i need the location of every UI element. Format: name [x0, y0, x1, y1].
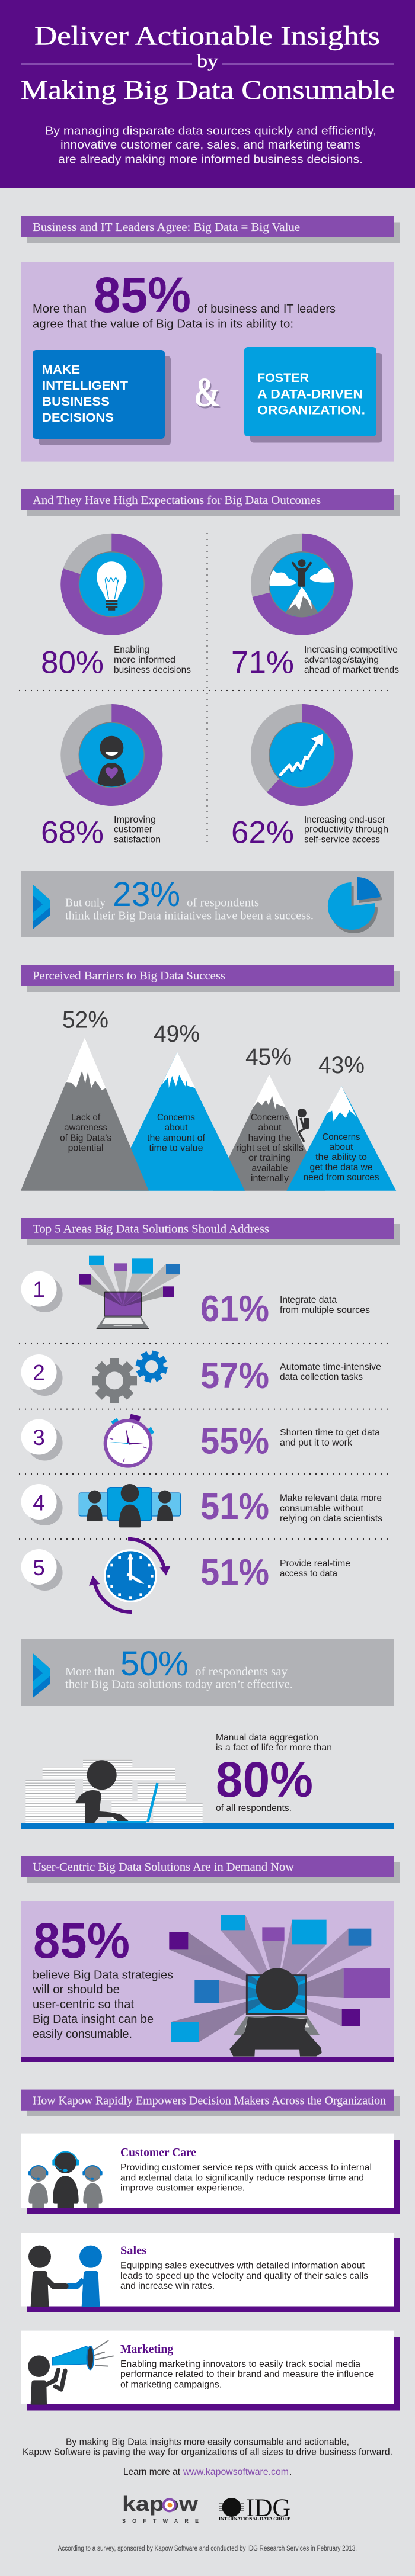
barrier: 49 percent: time to value — [149, 1143, 203, 1153]
callout banner: 50 percent not effective: their Big Data solutions today aren’t effective. — [65, 1678, 293, 1691]
stat: 62 percent — [231, 815, 388, 850]
ampersand: & — [195, 372, 222, 417]
barrier: 43 percent: Concerns — [323, 1132, 360, 1142]
stat: 51 percent real-time: 51% — [200, 1552, 269, 1593]
title: Making Big Data Consumable — [21, 75, 395, 105]
donut chart: 80 percent with light bulb — [60, 534, 162, 635]
section heading: High Expectations: And They Have High Expectations for Big Data Outcomes — [33, 494, 321, 507]
stat: 51 percent: Make relevant data more — [280, 1493, 382, 1504]
stat: 57 percent: 57% — [200, 1356, 269, 1396]
logo: IDG: IDG — [246, 2494, 290, 2522]
card text: improve customer experience. — [120, 2183, 245, 2193]
stat: 57 percent — [200, 1356, 381, 1396]
section heading: How Kapow — [21, 2090, 400, 2116]
barrier: 52 percent: 52% — [62, 1007, 108, 1033]
stat: 61 percent: from multiple sources — [280, 1305, 370, 1315]
stat: 68 percent: customer — [114, 825, 153, 835]
barrier: 49 percent — [147, 1021, 206, 1153]
closing statement: Learn more at — [123, 2467, 181, 2477]
barrier: 45 percent: internally — [251, 1173, 289, 1183]
number badge 4 — [21, 1484, 63, 1525]
stat: 71 percent: advantage/staying — [304, 655, 379, 665]
icon: light bulb — [97, 561, 126, 611]
donut chart: 62 percent with rising arrow — [251, 704, 353, 806]
card: Sales — [21, 2233, 400, 2312]
closing statement: Kapow Software is paving the way for organizations of all sizes to drive business forward. — [23, 2447, 392, 2457]
stat: 55 percent: 55% — [200, 1421, 269, 1462]
icon: laptop with data sources — [79, 1256, 180, 1329]
stat: 80 percent — [41, 645, 191, 680]
panel: 85 percent user-centric — [21, 1901, 394, 2062]
stat: 51 percent — [200, 1486, 382, 1527]
barrier: 49 percent: about — [165, 1123, 188, 1133]
barrier: 43 percent: get the data we — [309, 1162, 373, 1173]
rank 3: shorten time — [21, 1414, 380, 1466]
stat: 51 percent: consumable without — [280, 1504, 364, 1514]
closing statement: www.kapowsoftware.com — [183, 2467, 289, 2477]
barrier: 43 percent: the ability to — [315, 1152, 367, 1162]
number badge 3 — [21, 1419, 63, 1460]
title: Deliver Actionable Insights — [34, 20, 380, 51]
stat: 68 percent — [41, 815, 161, 850]
stat text — [32, 1913, 173, 2041]
card text: Sales — [120, 2244, 146, 2257]
card text: Customer Care — [120, 2146, 196, 2159]
logo: IDG: INTERNATIONAL DATA GROUP — [219, 2516, 290, 2522]
number badge 5: 5 — [33, 1556, 45, 1580]
section heading: Business and IT Leaders Agree — [21, 216, 400, 243]
header banner — [0, 0, 415, 188]
stat: 80 percent manual aggregation — [216, 1733, 332, 1813]
stat: 55 percent: and put it to work — [280, 1438, 353, 1448]
section heading: User-Centric: User-Centric Big Data Solutions Are in Demand Now — [33, 1861, 295, 1874]
barrier: 45 percent: having the — [248, 1133, 292, 1143]
icon: handshake — [28, 2246, 102, 2307]
barrier: 43 percent: need from sources — [304, 1173, 379, 1183]
stat: 57 percent: data collection tasks — [280, 1372, 363, 1382]
card text: and increase win rates. — [120, 2281, 215, 2291]
card text: Marketing — [120, 2343, 173, 2356]
person — [76, 1760, 129, 1823]
number badge 3: 3 — [33, 1425, 45, 1450]
callout: make intelligent business decisions — [33, 350, 171, 445]
logo: IDG — [219, 2494, 290, 2522]
barrier: 43 percent: 43% — [318, 1052, 365, 1078]
stat: 68 percent: 68% — [41, 815, 104, 850]
rank 5: real-time access — [21, 1539, 350, 1612]
stat: 68 percent: satisfaction — [114, 835, 161, 844]
card text: and external data to significantly reduce response time and — [120, 2173, 364, 2183]
intro text: are already making more informed business decisions. — [58, 153, 363, 166]
stat text: easily consumable. — [33, 2028, 132, 2041]
logo: Kapow Software: SOFTWARE — [122, 2518, 199, 2524]
barrier: 45 percent — [236, 1044, 304, 1183]
icon: gears — [92, 1350, 168, 1403]
statement text: of business and IT leaders — [197, 303, 336, 316]
intro text: innovative customer care, sales, and marketing teams — [60, 139, 360, 152]
statement text: 85% — [94, 267, 191, 323]
barrier: 49 percent: the amount of — [147, 1133, 206, 1143]
card text: performance related to their brand and measure the influence — [120, 2369, 374, 2379]
barrier: 43 percent: about — [330, 1142, 353, 1152]
stat text: Big Data insight can be — [33, 2013, 154, 2026]
icon: three users at screens — [79, 1484, 180, 1527]
number badge 2: 2 — [33, 1361, 45, 1385]
logo: Kapow Software: kapow — [122, 2493, 199, 2516]
barrier: 52 percent: Lack of — [71, 1113, 101, 1123]
section heading: Perceived Barriers — [21, 965, 400, 992]
stat: 71 percent: Increasing competitive — [304, 645, 398, 655]
illustration: person buried in paper — [21, 1759, 394, 1829]
stat: 51 percent: relying on data scientists — [280, 1514, 382, 1524]
stat: 80 percent manual aggregation: is a fact of life for more than — [216, 1743, 332, 1753]
stat: 51 percent real-time — [200, 1552, 350, 1593]
barrier: 52 percent — [60, 1007, 111, 1153]
icon: stopwatch — [106, 1414, 154, 1466]
icon: person with megaphone — [28, 2340, 114, 2405]
stat: 68 percent: Improving — [114, 815, 156, 825]
stat: 62 percent: self-service access — [304, 835, 380, 844]
statement text: More than — [33, 303, 87, 316]
card: Marketing — [21, 2331, 400, 2410]
stat: 51 percent: 51% — [200, 1486, 269, 1527]
barrier: 52 percent: awareness — [64, 1123, 107, 1133]
number badge 1 — [21, 1271, 63, 1312]
icon: clock with cycle arrows — [89, 1539, 171, 1612]
barrier: 45 percent: available — [251, 1163, 288, 1174]
callout banner: 23 percent success: of respondents — [187, 897, 259, 910]
stat: 80 percent manual aggregation: 80% — [216, 1752, 313, 1807]
icon: smiling person with heart — [97, 736, 126, 787]
rank 2: automate data collection — [21, 1350, 381, 1403]
callout: make intelligent business decisions: MAKE — [42, 363, 80, 377]
icon: person on summit — [269, 559, 334, 616]
card text: Equipping sales executives with detailed information about — [120, 2261, 365, 2271]
stat: 61 percent: 61% — [200, 1289, 269, 1329]
barrier: 45 percent: 45% — [245, 1044, 292, 1070]
icon: chevron — [33, 1653, 50, 1698]
card text: Enabling marketing innovators to easily track social media — [120, 2359, 360, 2369]
stat text: will or should be — [32, 1983, 120, 1996]
illustration: user at laptop with data sources — [169, 1915, 390, 2057]
barrier: 45 percent: right set of skills — [236, 1143, 304, 1153]
barrier: 52 percent: potential — [68, 1143, 104, 1153]
callout: make intelligent business decisions: DECISIONS — [42, 411, 114, 425]
panel: 85 percent of leaders — [21, 262, 394, 462]
barrier: 52 percent: of Big Data’s — [60, 1133, 111, 1143]
card: Customer Care — [21, 2134, 400, 2214]
callout banner: 50 percent not effective: 50% — [120, 1644, 189, 1683]
statement text: agree that the value of Big Data is in its ability to: — [33, 318, 293, 331]
callout: foster a data-driven organization: ORGANIZATION. — [257, 404, 365, 417]
callout banner: 50 percent not effective: More than — [65, 1665, 115, 1678]
callout banner: 50 percent not effective: of respondents say — [195, 1665, 288, 1678]
stat: 80 percent: 80% — [41, 645, 104, 680]
icon: chevron — [33, 884, 50, 929]
stat: 80 percent manual aggregation: of all respondents. — [216, 1803, 292, 1813]
rank 4: consumable data — [21, 1484, 382, 1527]
stat: 51 percent real-time: access to data — [280, 1569, 337, 1579]
stat: 55 percent: Shorten time to get data — [280, 1428, 380, 1438]
callout banner: 23 percent success: think their Big Data initiatives have been a success. — [65, 910, 314, 923]
number badge 4: 4 — [33, 1491, 45, 1515]
paper stacks — [25, 1759, 203, 1825]
card text: of marketing campaigns. — [120, 2380, 222, 2390]
closing statement: By making Big Data insights more easily consumable and actionable, — [66, 2437, 349, 2447]
card text: Providing customer service reps with quick access to internal — [120, 2163, 372, 2173]
closing statement: . — [289, 2467, 292, 2477]
logo: Kapow Software — [122, 2493, 199, 2524]
mountain chart: barriers to success — [21, 1007, 396, 1191]
stat text: user-centric so that — [33, 1998, 134, 2011]
donut chart: 71 percent with mountain climber — [251, 534, 353, 635]
icon: call center agents — [28, 2151, 103, 2208]
section heading: Top 5 Areas: Top 5 Areas Big Data Solutions Should Address — [33, 1223, 269, 1236]
rank 1: integrate data — [21, 1256, 370, 1329]
callout: foster a data-driven organization: A DATA-DRIVEN — [257, 387, 363, 402]
section heading: Top 5 Areas — [21, 1218, 400, 1245]
title — [21, 20, 395, 105]
card text: leads to speed up the velocity and quality of their sales calls — [120, 2271, 368, 2281]
source note: According to a survey, sponsored by Kapow Software and conducted by IDG Research Services in February 2013. — [58, 2545, 357, 2552]
stat: 57 percent: Automate time-intensive — [280, 1362, 381, 1372]
barrier: 45 percent: about — [258, 1123, 282, 1133]
stat: 62 percent: 62% — [231, 815, 294, 850]
section heading: User-Centric — [21, 1856, 400, 1883]
callout: make intelligent business decisions: INTELLIGENT — [42, 379, 128, 393]
callout: make intelligent business decisions: BUSINESS — [42, 395, 110, 409]
section heading: High Expectations — [21, 489, 400, 516]
barrier: 43 percent — [304, 1052, 379, 1183]
stat: 80 percent: business decisions — [114, 665, 191, 675]
stat: 62 percent: Increasing end-user — [304, 815, 386, 825]
statement text — [33, 267, 336, 331]
stat: 80 percent manual aggregation: Manual data aggregation — [216, 1733, 318, 1743]
intro text: By managing disparate data sources quickly and efficiently, — [45, 124, 376, 137]
callout banner: 50 percent not effective — [21, 1639, 394, 1706]
barrier: 49 percent: Concerns — [157, 1113, 195, 1123]
callout banner: 23 percent success — [21, 871, 394, 937]
section heading: Business and IT Leaders Agree: Business and IT Leaders Agree: Big Data = Big Value — [33, 221, 300, 234]
barrier: 45 percent: or training — [248, 1153, 291, 1163]
stat: 62 percent: productivity through — [304, 825, 388, 835]
icon: pie chart — [328, 877, 382, 933]
donut chart: 68 percent with smiling person — [60, 704, 162, 806]
card text — [120, 2146, 372, 2193]
number badge 5 — [21, 1549, 63, 1591]
stat: 71 percent — [231, 645, 399, 680]
ampersand: & — [194, 370, 221, 416]
card text — [120, 2244, 368, 2291]
stat: 80 percent: Enabling — [114, 645, 149, 655]
mountains — [21, 1038, 396, 1191]
number badge 2 — [21, 1354, 63, 1396]
stat: 61 percent: Integrate data — [280, 1295, 337, 1305]
callout: foster a data-driven organization — [244, 347, 382, 443]
stat: 71 percent: ahead of market trends — [304, 665, 399, 675]
stat: 71 percent: 71% — [231, 645, 294, 680]
card text — [120, 2343, 374, 2390]
stat text: 85% — [33, 1913, 130, 1968]
intro text — [45, 124, 376, 166]
callout banner: 23 percent success: But only — [65, 897, 106, 910]
section heading: How Kapow: How Kapow Rapidly Empowers Decision Makers Across the Organization — [33, 2094, 386, 2107]
icon: hiker — [296, 1109, 309, 1142]
barrier: 49 percent: 49% — [154, 1021, 200, 1047]
callout: foster a data-driven organization: FOSTER — [257, 371, 309, 385]
stat: 80 percent: more informed — [114, 655, 175, 665]
stat: 61 percent — [200, 1289, 370, 1329]
stat text: believe Big Data strategies — [33, 1968, 173, 1981]
section heading: Perceived Barriers: Perceived Barriers to Big Data Success — [33, 969, 225, 982]
closing statement — [23, 2437, 392, 2477]
icon: rising arrow — [280, 734, 323, 776]
barrier: 45 percent: Concerns — [251, 1113, 289, 1123]
number badge 1: 1 — [33, 1277, 45, 1302]
stat: 51 percent real-time: Provide real-time — [280, 1559, 350, 1569]
title: by — [197, 50, 219, 71]
laptop — [107, 1783, 159, 1823]
stat: 55 percent — [200, 1421, 380, 1462]
callout banner: 23 percent success: 23% — [113, 875, 180, 914]
